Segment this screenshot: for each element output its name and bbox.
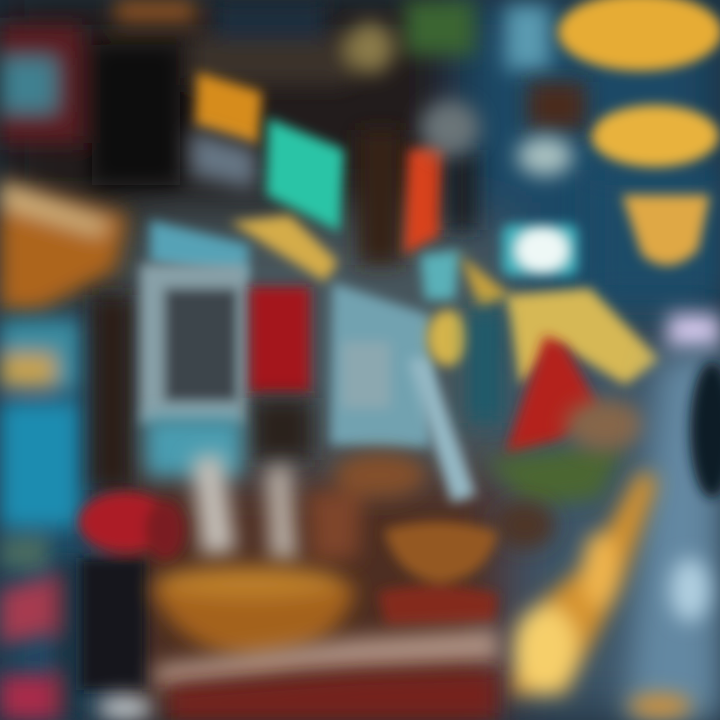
white bottles [192, 453, 298, 560]
dark post [92, 295, 132, 490]
teal awning [420, 250, 460, 300]
pale reflection [670, 558, 710, 622]
left orange awning [0, 178, 128, 310]
large yellow canopy [505, 288, 660, 385]
brown food on right [565, 399, 645, 451]
lamp 1 [558, 0, 720, 71]
yellow awning top [230, 215, 338, 282]
right pale blue window area [625, 350, 720, 720]
dark block beside red panel [447, 150, 477, 230]
pale blue board [330, 282, 430, 448]
red object with dark base [79, 492, 185, 690]
pale table surface [155, 628, 500, 688]
pale glow under fixture [517, 136, 573, 176]
large front bowl [150, 566, 356, 662]
yellow awning [460, 255, 510, 310]
dark hanging fixture [528, 82, 586, 130]
pale panel under orange sign [190, 130, 258, 190]
glowing counter light strip [510, 470, 692, 718]
middle bowls [308, 453, 555, 562]
lamp 2 [591, 105, 719, 167]
dark figure at right edge [690, 362, 720, 498]
sign boards in mid row [140, 215, 476, 503]
right ceiling blue wall [602, 173, 720, 301]
red-orange panel [404, 142, 446, 255]
stacked bowl center [378, 521, 498, 625]
blue lower board [146, 418, 242, 476]
salad greens [485, 442, 625, 506]
grey framed board [140, 264, 248, 424]
purple-white light at right edge [668, 314, 720, 348]
right awning group [420, 250, 660, 506]
upper-left wall with framed signs [0, 0, 550, 185]
teal glowing screen [266, 118, 345, 232]
light blue awning [150, 220, 250, 280]
dark stand under red board [252, 398, 312, 460]
pendant lamps [558, 0, 720, 265]
yellow small sign [427, 310, 469, 366]
grey sign near ceiling [420, 100, 480, 156]
red figure [505, 335, 600, 455]
light diagonal pole [408, 356, 476, 503]
white glowing sign [502, 224, 578, 276]
red table base [168, 670, 498, 720]
pink and red lower-left panels [0, 560, 80, 720]
white cup at bottom [97, 696, 153, 720]
blue-teal left wall [0, 320, 80, 570]
dark teal gap [468, 308, 502, 423]
lamp 3 [622, 195, 710, 265]
orange sign [195, 72, 262, 145]
red board [250, 287, 310, 393]
dark column between signs [358, 130, 403, 265]
